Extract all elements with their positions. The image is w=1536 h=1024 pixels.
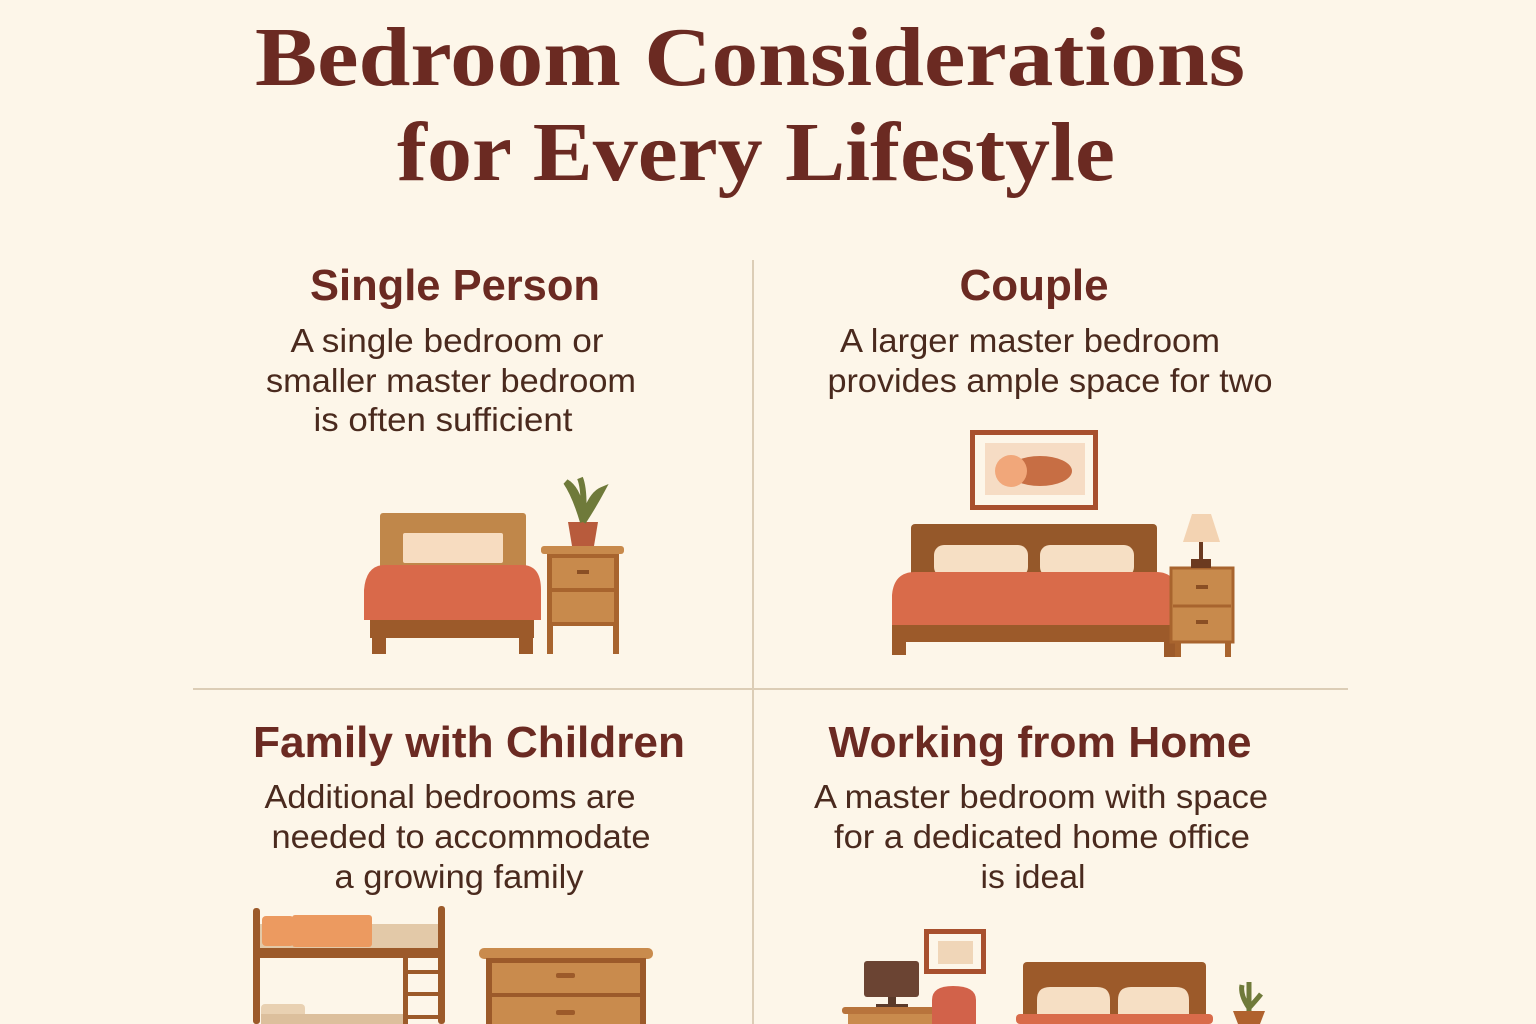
panel: single person — [266, 261, 636, 654]
title — [255, 11, 1245, 199]
title: for Every Lifestyle — [397, 106, 1115, 199]
panel: family with children — [253, 718, 685, 1024]
heading: wfh: Working from Home — [828, 718, 1252, 767]
heading: couple: Couple — [959, 261, 1109, 310]
icon: single bed with nightstand — [364, 478, 624, 654]
text: wfh: A master bedroom with space — [814, 778, 1268, 815]
heading: single person: Single Person — [310, 261, 600, 310]
text: wfh: is ideal — [980, 858, 1086, 895]
text: single person: is often sufficient — [314, 401, 572, 438]
text: couple — [828, 322, 1272, 399]
heading: family: Family with Children — [253, 718, 685, 767]
panel: couple — [828, 261, 1272, 657]
title: Bedroom Considerations — [255, 11, 1245, 104]
icon: desk, chair, bed and plant — [842, 929, 1265, 1024]
text: couple: provides ample space for two — [828, 362, 1272, 399]
icon: double bed with picture and lamp — [892, 430, 1233, 657]
icon: bunk bed and dresser — [253, 906, 653, 1024]
text: family: Additional bedrooms are — [264, 778, 636, 815]
text: single person: smaller master bedroom — [266, 362, 636, 399]
text: couple: A larger master bedroom — [840, 322, 1220, 359]
text: single person: A single bedroom or — [290, 322, 604, 359]
text: family — [264, 778, 650, 895]
text: wfh: for a dedicated home office — [834, 818, 1250, 855]
text: wfh — [814, 778, 1268, 895]
text: family: a growing family — [334, 858, 584, 895]
text: family: needed to accommodate — [272, 818, 650, 855]
panel: working from home — [814, 718, 1268, 1024]
text: single person — [266, 322, 636, 438]
